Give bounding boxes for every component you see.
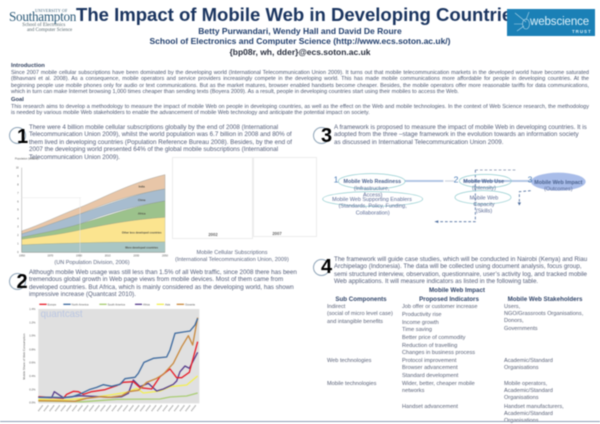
- number badge 3: [312, 125, 332, 147]
- diagram: three-stage framework: (Skills): [476, 209, 492, 215]
- chart: world population stacked area: 1970: [47, 254, 54, 258]
- chart: mobile share of web consumption: 0.2%: [29, 387, 36, 391]
- number badge 3: 3: [321, 125, 332, 147]
- diagram: three-stage framework: Mobile Web Supporting Enablers: [332, 197, 412, 203]
- logo: Web Science Trust: webscience: [530, 16, 589, 28]
- text: introduction: which in turn can make Internet browsing 1,000 times cheaper than sending texts (Boyera 2009). As a result, people in developing countries start using their mobiles to access the Web.: [11, 89, 459, 95]
- chart: mobile share of web consumption: Africa: [143, 302, 150, 306]
- column: proposed indicators: Time saving: [402, 327, 432, 333]
- column: proposed indicators: Better price of commodity: [402, 335, 465, 341]
- text: introduction: beginning people use mobile phones only for audio or text communications. But as the market matures, browser enabled handsets become cheaper. Besides, the mobile operators offer more reasonable tariffs for data communications,: [11, 83, 589, 89]
- chart: world population stacked area: India: [139, 185, 145, 189]
- diagram: three-stage framework: Mobile Web Readiness: [344, 179, 401, 185]
- diagram: three-stage framework: Capacity: [473, 202, 495, 208]
- text: section 4: semi structured interview, observation, questionnaire, user’s activity log, and tracked mobile: [334, 270, 587, 278]
- column: sub components: [326, 304, 394, 387]
- text: section 4: The framework will guide case studies, which will be conducted in Nairobi (Kenya) and Riau: [334, 256, 587, 262]
- chart: world population stacked area: 4: [17, 217, 19, 220]
- logo: Web Science Trust: [507, 9, 595, 36]
- column: stakeholders: Handset manufacturers,: [504, 404, 564, 410]
- text: goal: is needed by various mobile Web stakeholders to enable the advancement of mobile Web technology and anticipate the potential impact on society.: [11, 110, 370, 116]
- column: stakeholders: Donors,: [504, 318, 524, 324]
- chart: mobile share of web consumption: Europe: [48, 302, 57, 306]
- column: proposed indicators: Productivity rise: [402, 312, 441, 318]
- number badge 2: 2: [16, 271, 28, 293]
- chart: world population stacked area: 7: [17, 192, 19, 195]
- chart: world population stacked area: 10: [16, 167, 19, 170]
- chart: mobile share of web consumption: 0.6%: [29, 361, 36, 365]
- chart: mobile share of web consumption: 0.8%: [29, 347, 36, 351]
- diagram: three-stage framework: Mobile Web Impact: [534, 180, 583, 186]
- column: sub components: and intangible benefits: [327, 319, 383, 325]
- column: stakeholders: NGO/Grassroots Organisations,: [504, 311, 583, 317]
- diagram: three-stage framework: Collaboration): [356, 210, 390, 216]
- number badge 4: 4: [321, 256, 332, 278]
- chart: world population stacked area: 2: [17, 234, 19, 237]
- caption: subscriptions charts: [174, 249, 290, 262]
- column header: proposed indicators: Proposed Indicators: [419, 296, 479, 302]
- text: section 3: adopted from the three –stage framework in the evolution towards an information society: [334, 131, 579, 138]
- column: sub components: Mobile technologies: [327, 381, 376, 387]
- diagram: three-stage framework: Access): [363, 193, 383, 199]
- panel: subscriptions 2002: 2002: [208, 232, 218, 237]
- panel: subscriptions 2007: [253, 157, 317, 237]
- text: section 3: [334, 124, 588, 146]
- column: proposed indicators: Wider, better, cheaper mobile: [402, 381, 475, 387]
- text: goal: [10, 103, 590, 116]
- column: proposed indicators: Browser advancement: [402, 365, 458, 371]
- diagram: three-stage framework: (Intensity): [472, 186, 496, 192]
- text: section 4: Archipelago (Indonesia). The data will be collected using document analysis, focus group,: [334, 263, 582, 270]
- chart: world population stacked area: 3: [17, 226, 19, 229]
- column: stakeholders: Users,: [504, 304, 520, 310]
- text: section 3: A framework is proposed to measure the impact of mobile Web in developing countries. It is: [334, 124, 587, 130]
- column: sub components: Web technologies: [327, 358, 371, 364]
- logo: University of Southampton: School of Electronics: [22, 23, 65, 28]
- diagram: three-stage framework: 3: [528, 175, 533, 185]
- number badge 4: [312, 256, 333, 278]
- logo: University of Southampton: Southampton: [9, 9, 76, 24]
- text: goal: This research aims to develop a methodology to measure the impact of mobile Web on people in developing countries, as well as the effect on the Web and mobile technologies. In the context of Web Science research, the methodology: [11, 104, 589, 110]
- authors and affiliation: Betty Purwandari, Wendy Hall and David De Roure: [198, 26, 402, 36]
- diagram: three-stage framework: Mobile Web: [470, 195, 498, 201]
- panel: subscriptions 2002: [172, 157, 253, 239]
- chart: world population stacked area: 1950: [19, 254, 25, 258]
- chart: world population stacked area: 5: [17, 209, 19, 212]
- text: introduction: [10, 69, 590, 95]
- text: section 1: [28, 124, 292, 161]
- chart: world population stacked area: 8: [17, 183, 19, 186]
- logo: University of Southampton: [9, 8, 76, 33]
- text: section 2: tremendous global growth in Web page views from mobile devices. Most of them came from: [29, 276, 283, 283]
- column: proposed indicators: Standard development: [402, 373, 458, 379]
- text: section 4: Web applications. It will measure indicators as listed in the following table.: [334, 278, 538, 285]
- column: proposed indicators: Protocol improvement: [402, 358, 456, 364]
- chart: world population stacked area: 0: [17, 251, 19, 254]
- number badge 1: [8, 126, 28, 148]
- column: proposed indicators: Handset advancement: [402, 404, 458, 410]
- diagram: three-stage framework: 1: [334, 175, 339, 185]
- chart: mobile share of web consumption: North America: [72, 302, 89, 306]
- caption: subscriptions charts: (International Telecommunication Union, 2009): [175, 256, 289, 262]
- logo: University of Southampton: and Computer Science: [27, 28, 72, 33]
- logo: University of Southampton: UNIVERSITY OF: [35, 8, 68, 13]
- chart: world population stacked area: 2010: [105, 254, 111, 258]
- chart: mobile share of web consumption: South America: [108, 302, 125, 306]
- text: section 2: developed countries. But Africa, which is mainly considered as the developing world, has shown: [29, 284, 294, 290]
- text: section 3: as discussed in International Telecommunication Union 2009.: [334, 138, 503, 146]
- chart: world population stacked area: 6: [17, 200, 19, 203]
- column header: sub components: Sub Components: [335, 296, 387, 302]
- text: section 4: [334, 256, 588, 286]
- text: section 2: [28, 268, 298, 298]
- chart: world population stacked area: 1: [17, 243, 19, 246]
- column: stakeholders: Academic/Standard: [504, 388, 553, 394]
- column: stakeholders: Organisations: [504, 365, 539, 371]
- text: section 1: There were 4 billion mobile cellular subscriptions globally by the end of 2008 (International: [29, 124, 278, 130]
- text: introduction: Since 2007 mobile cellular subscriptions have been dominated by the developing world (International Telecommunication Union 2009). It turns out that mobile telecommunication markets in the developed world have become saturated: [11, 70, 589, 76]
- footer rule: [0, 421, 600, 422]
- caption: population chart: (UN Population Division, 2006): [54, 260, 130, 266]
- chart: world population stacked area: Africa: [138, 211, 146, 215]
- chart: world population stacked area: More developed countries: [125, 245, 159, 249]
- column: stakeholders: Academic/Standard: [504, 358, 553, 364]
- column: proposed indicators: networks: [402, 388, 424, 394]
- column: proposed indicators: Reduction of travelling: [402, 343, 457, 349]
- chart: mobile share of web consumption: 1.2%: [29, 320, 36, 324]
- chart: world population stacked area: Other less developed countries: [122, 230, 162, 234]
- column: stakeholders: Organisations: [504, 418, 539, 424]
- text: section 1: Telecommunication Union 2009), whilst the world population was 6.7 billion in 2008 and 80% of: [29, 131, 292, 138]
- chart: world population stacked area: 2050: [162, 254, 168, 258]
- title: The Impact of Mobile Web in Developing Countries: [76, 4, 522, 25]
- column header: stakeholders: Mobile Web Stakeholders: [508, 296, 582, 302]
- diagram: three-stage framework: Mobile Web Use: [463, 179, 504, 185]
- column: stakeholders: Organisations: [504, 395, 539, 401]
- diagram: three-stage framework: (Outcomes): [544, 187, 573, 193]
- chart: mobile share of web consumption: 0.4%: [29, 374, 36, 378]
- text: section 1: them lived in developing countries (Population Reference Bureau 2008). Besides, by the end of: [29, 138, 292, 146]
- text: section 1: Telecommunication Union 2009).: [29, 154, 120, 160]
- text: section 2: impressive increase (Quantcast 2010).: [29, 291, 136, 298]
- diagram: three-stage framework: (Infrastructure,: [354, 186, 390, 192]
- logo: Web Science Trust: TRUST: [572, 28, 592, 34]
- caption: subscriptions charts: Mobile Cellular Subscriptions: [197, 250, 267, 256]
- column: stakeholders: Academic/Standard: [504, 411, 553, 417]
- diagram: three-stage framework: 2: [454, 175, 459, 185]
- column: sub components: (social of micro level case): [327, 311, 393, 317]
- column: sub components: Indirect: [327, 304, 345, 310]
- chart: world population stacked area: Population (billions): [15, 156, 38, 160]
- authors and affiliation: {bp08r, wh, dder}@ecs.soton.ac.uk: [229, 47, 371, 57]
- chart: mobile share of web consumption: Asia: [165, 302, 171, 306]
- number badge 2: [8, 271, 28, 293]
- column: stakeholders: Mobile operators,: [504, 381, 547, 387]
- chart: mobile share of web consumption: 1.0%: [29, 334, 36, 338]
- chart: world population stacked area: 1990: [76, 254, 82, 258]
- chart: world population stacked area: 2030: [133, 254, 140, 258]
- column: proposed indicators: Income growth: [402, 320, 439, 326]
- table: mobile web impact: [326, 286, 584, 424]
- authors and affiliation: School of Electronics and Computer Science (http://www.ecs.soton.ac.uk/): [149, 36, 451, 46]
- number badge 1: 1: [17, 126, 28, 148]
- authors and affiliation: [149, 26, 451, 58]
- column: stakeholders: Governments: [504, 326, 538, 332]
- column: proposed indicators: Changes in business process: [402, 350, 475, 356]
- chart: world population stacked area: China: [138, 198, 146, 202]
- text: introduction: (Bhavnani et al. 2008). As a consequence, mobile operators and service providers increasingly compete in the developing world. This has made mobile communications more affordable for people in developing countries. At the: [11, 76, 589, 82]
- column: stakeholders: [504, 304, 584, 424]
- chart: mobile share of web consumption: quantcast: [41, 309, 83, 320]
- chart: mobile share of web consumption: Mobile Share of Web Consumption: [22, 333, 26, 380]
- chart: mobile share of web consumption: Oceania: [185, 302, 195, 306]
- text: section 2: Although mobile Web usage was still less than 1.5% of all Web traffic, since 2008 there has been: [29, 268, 297, 276]
- diagram: three-stage framework: (Standards, Policy, Funding,: [339, 204, 407, 210]
- column: proposed indicators: Job offer or customer increase: [402, 304, 477, 310]
- column: proposed indicators: [402, 303, 478, 410]
- heading: introduction: Introduction: [11, 63, 45, 69]
- panel: subscriptions 2007: 2007: [272, 231, 282, 236]
- chart: mobile share of web consumption: 1.4%: [29, 307, 36, 311]
- table title: Mobile Web Impact: [429, 287, 485, 294]
- text: section 1: 2007 the developing world presented 64% of the global mobile subscriptions (International: [29, 146, 278, 153]
- heading: goal: Goal: [11, 97, 24, 103]
- chart: mobile share of web consumption: 0.0%: [29, 401, 36, 405]
- chart: world population stacked area: 9: [17, 175, 19, 178]
